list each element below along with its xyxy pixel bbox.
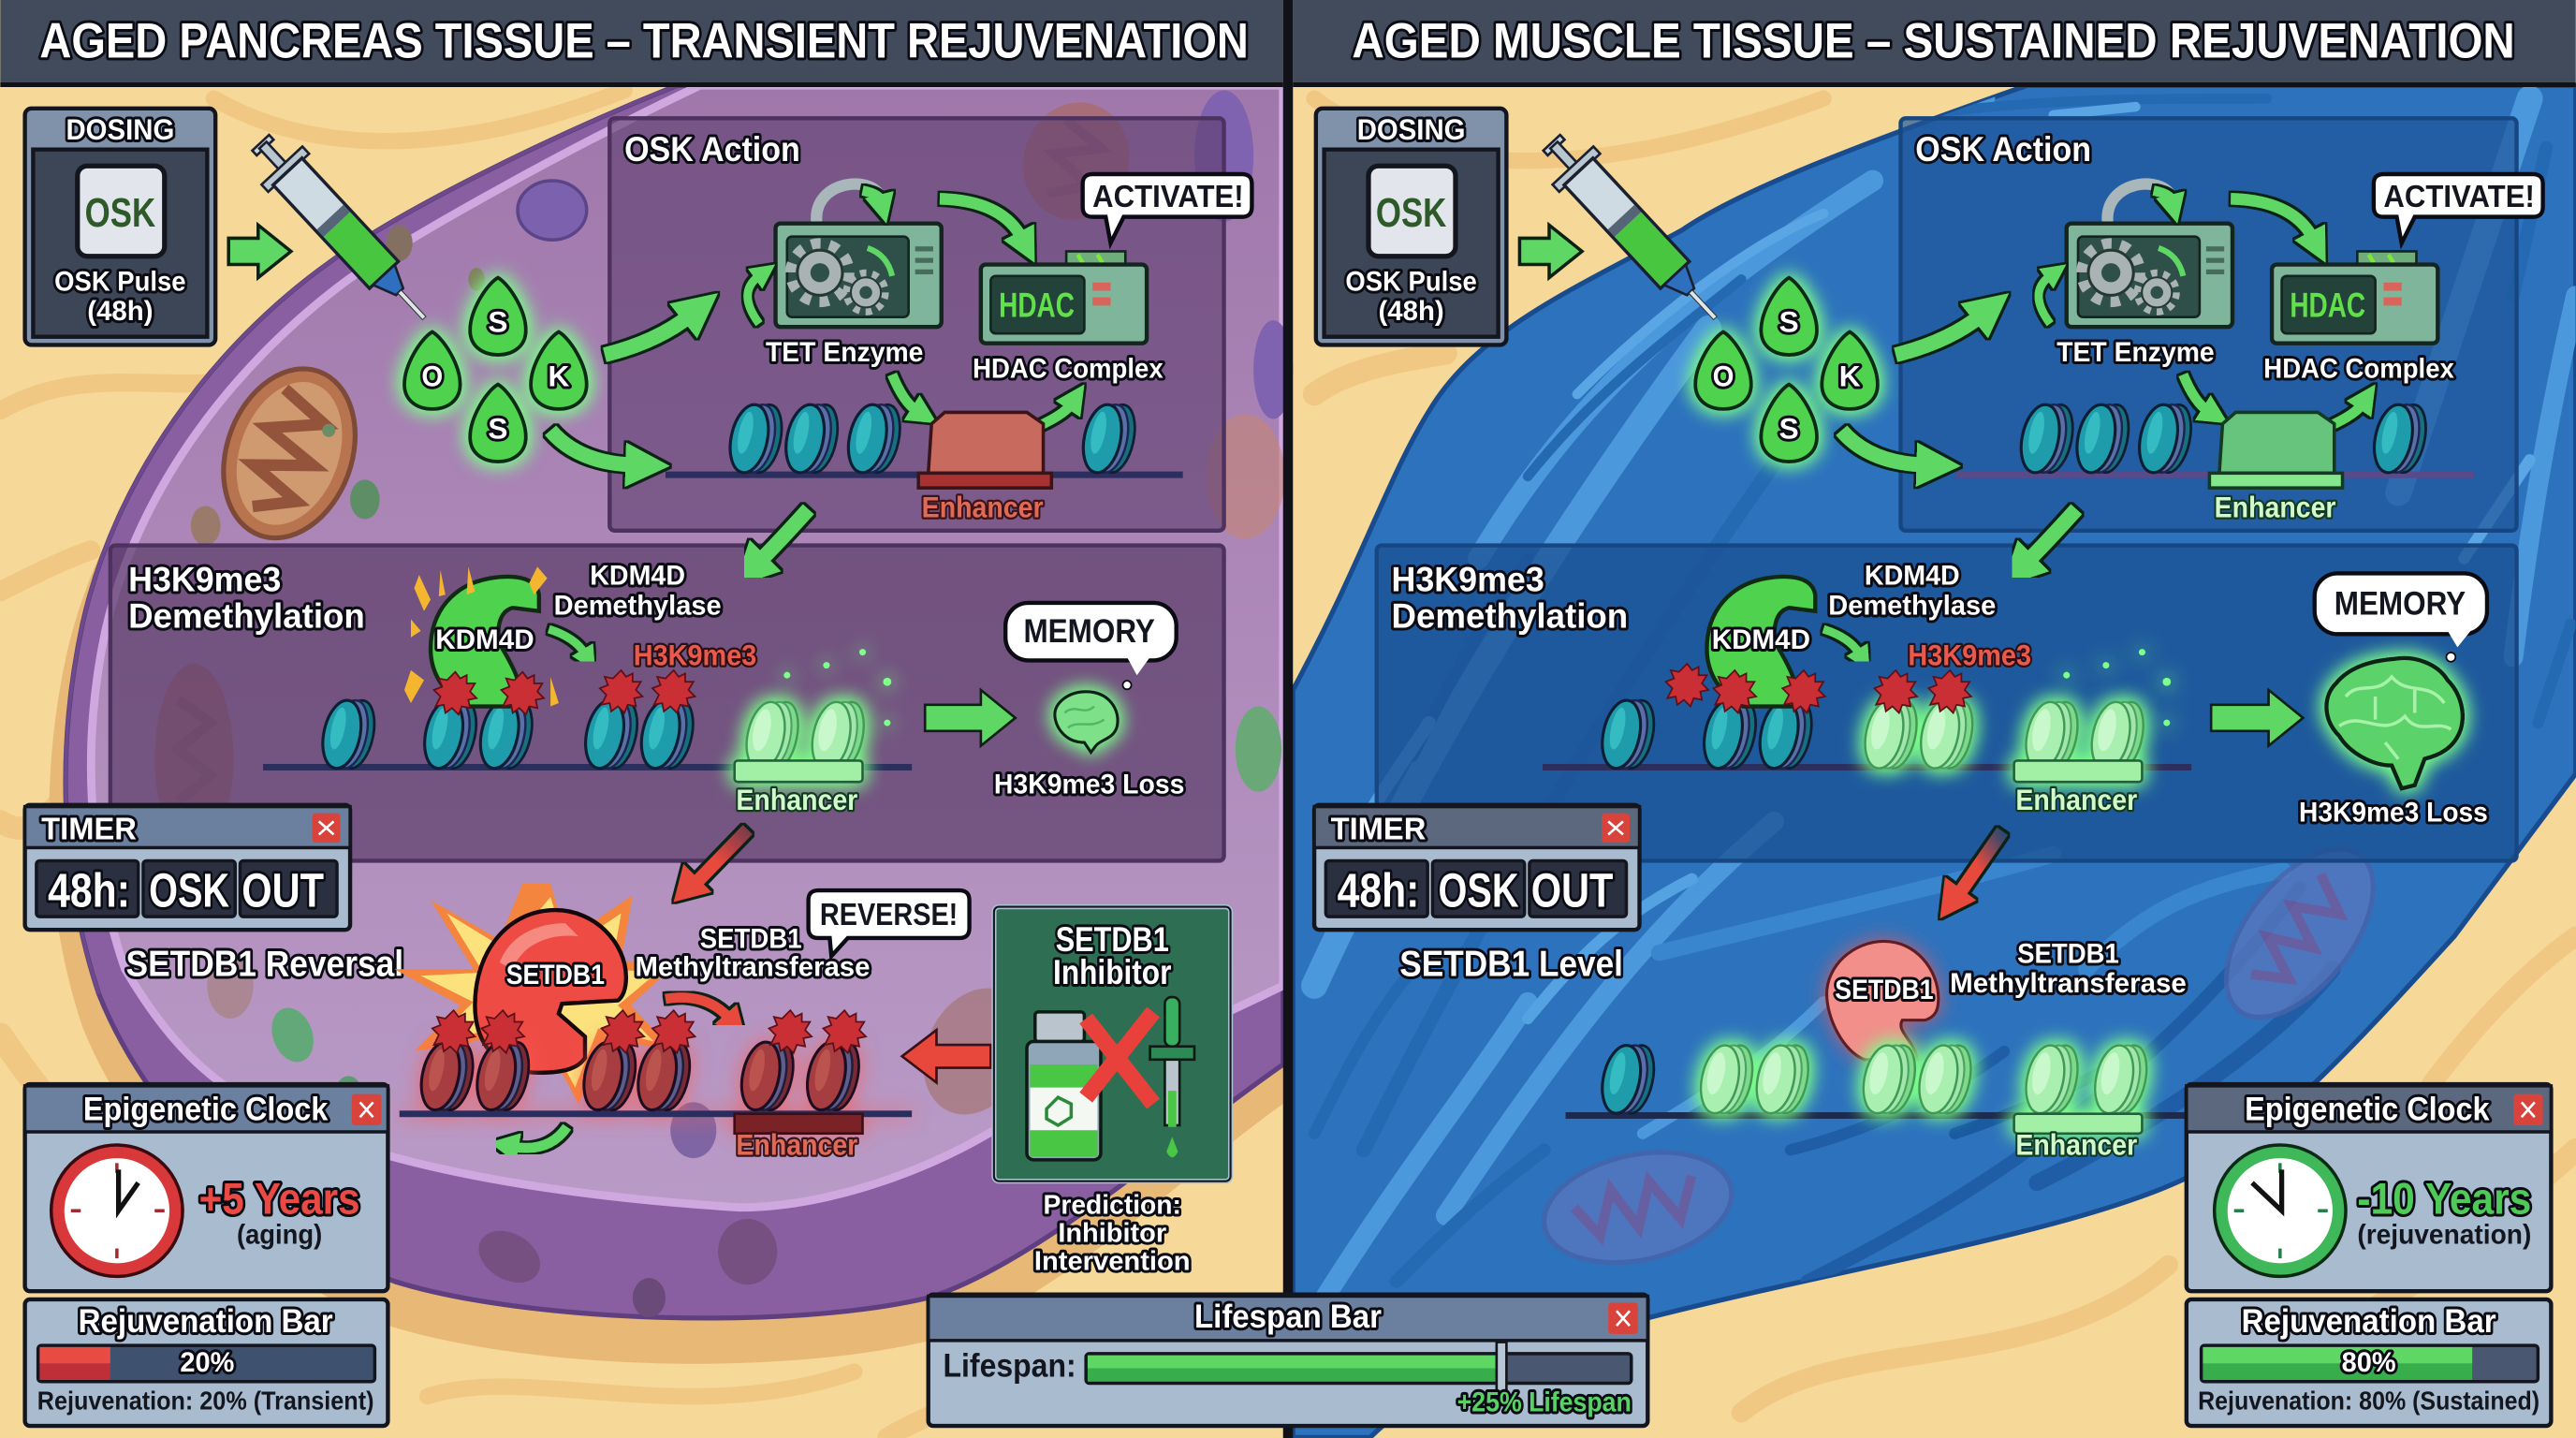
arrows: OSK to targets right xyxy=(1841,315,1981,465)
icon: bottle xyxy=(1027,1012,1101,1160)
OSK drops left: O xyxy=(421,359,443,392)
mitochondrion: muscle upper right xyxy=(2198,823,2402,1043)
HDAC machine left xyxy=(981,251,1147,344)
label: prediction: Inhibitor xyxy=(1058,1219,1166,1249)
lifespan label: Lifespan: xyxy=(944,1347,1076,1384)
label: Enhancer left: Enhancer xyxy=(922,491,1044,524)
organelle: purple vesicle xyxy=(518,181,587,240)
panel: dosing right xyxy=(1316,109,1506,345)
HDAC machine right xyxy=(2272,251,2437,344)
label: H3K9me3 Demethylation left: Demethylation xyxy=(128,596,365,635)
label: TET Enzyme left: TET Enzyme xyxy=(766,337,923,368)
icon: small brain left xyxy=(1055,692,1118,753)
clock close xyxy=(2513,1094,2543,1125)
label: H3K9me3 Loss left: H3K9me3 Loss xyxy=(994,770,1184,800)
label: H3K9me3 Loss right: H3K9me3 Loss xyxy=(2299,797,2488,828)
arrow: OSK action to demethylation right xyxy=(2027,509,2076,562)
enzyme: SETDB1 big xyxy=(475,910,626,1073)
label: KDM4D Demethylase left xyxy=(554,561,722,621)
label: H3K9me3 Demethylation right: Demethylation xyxy=(1392,596,1628,635)
panel: muscle H3K9me3 demethylation xyxy=(1377,546,2517,860)
callout: ACTIVATE right: ACTIVATE! xyxy=(2383,180,2535,214)
callout: ACTIVATE left: ACTIVATE! xyxy=(1092,180,1244,214)
timer close xyxy=(313,814,341,843)
label: TET Enzyme right: TET Enzyme xyxy=(2056,337,2215,368)
bar: 80% xyxy=(2342,1347,2396,1378)
panel: muscle OSK action xyxy=(1901,118,2517,531)
OSK drops left: S xyxy=(488,304,508,338)
timer readouts xyxy=(37,860,337,917)
label: H3K9me3 Demethylation right xyxy=(1392,561,1628,635)
label: OSK Action right: OSK Action xyxy=(1915,130,2091,169)
timer readouts: 48h: xyxy=(1338,864,1419,917)
label: SETDB1 Methyltransferase right: Methyltransferase xyxy=(1950,968,2187,999)
label: Enhancer lower right: Enhancer xyxy=(2015,1128,2137,1162)
icon: clock green xyxy=(2215,1145,2346,1276)
arrow: to memory right xyxy=(2211,690,2303,746)
label: SETDB1 Level: SETDB1 Level xyxy=(1399,944,1623,984)
panel: epigenetic clock right xyxy=(2187,1084,2551,1291)
panel: lifespan bar xyxy=(929,1295,1647,1426)
timer title: TIMER xyxy=(1331,813,1426,847)
enzyme: KDM4D left: KDM4D xyxy=(435,624,534,655)
label: SETDB1 Methyltransferase left xyxy=(635,923,870,982)
OSK vial key xyxy=(78,166,165,257)
timer title: TIMER xyxy=(41,813,137,847)
glow particles right xyxy=(2063,649,2171,726)
label: KDM4D Demethylase right xyxy=(1828,561,1996,621)
rejuvenation value: (rejuvenation) xyxy=(2357,1219,2531,1250)
chromatin left xyxy=(263,697,912,771)
histone marks left xyxy=(434,670,695,714)
label: HDAC Complex right: HDAC Complex xyxy=(2263,354,2454,385)
bar xyxy=(2202,1345,2538,1382)
header: right xyxy=(1293,0,2576,87)
arrows: TET loop and to HDAC right xyxy=(2039,191,2363,425)
bar title: Rejuvenation Bar xyxy=(2242,1303,2496,1340)
cell: pancreas xyxy=(66,85,1283,1318)
callout: ACTIVATE left xyxy=(1083,174,1251,243)
arrow: KDM4D action right xyxy=(1823,629,1860,653)
chromatin with red enhancer left xyxy=(666,401,1183,488)
dosing label: DOSING xyxy=(1357,112,1466,146)
pulse label: OSK Pulse xyxy=(1345,267,1477,298)
mitochondrion: faint in OSK panel xyxy=(1008,89,1145,233)
burst behind SETDB1 xyxy=(394,884,677,1104)
label: KDM4D Demethylase left: KDM4D xyxy=(590,561,685,592)
OSK vial key xyxy=(1368,166,1456,257)
rejuvenation value xyxy=(2357,1175,2531,1250)
label: H3K9me3 Demethylation left: H3K9me3 xyxy=(128,561,281,599)
histone marks red xyxy=(432,1010,866,1053)
TET enzyme machine left xyxy=(776,184,942,327)
timer readouts: 48h: xyxy=(48,864,130,917)
OSK action contents right xyxy=(1841,130,2543,524)
panel: epigenetic clock left xyxy=(25,1084,388,1291)
label: OSK Action left: OSK Action xyxy=(624,130,800,169)
icon: clock red xyxy=(51,1145,183,1276)
pulse label xyxy=(1345,267,1477,327)
label: SETDB1 Reversal: SETDB1 Reversal xyxy=(126,944,403,984)
arrows: OSK to targets left xyxy=(550,315,690,465)
panel: pancreas H3K9me3 demethylation xyxy=(110,546,1224,860)
mitochondrion: muscle lower xyxy=(1534,1137,1742,1279)
arrow: enhancer to SETDB1 right xyxy=(1940,831,2002,918)
timer readouts: OSK xyxy=(149,864,229,917)
icon: syringe right xyxy=(1531,124,1735,337)
lifespan title: Lifespan Bar xyxy=(1194,1299,1382,1335)
arrow: KDM4D action left xyxy=(549,629,585,653)
HDAC machine left: HDAC xyxy=(999,286,1075,325)
label: SETDB1 on small enzyme: SETDB1 xyxy=(1835,975,1934,1005)
arrow: green return xyxy=(513,1127,567,1148)
histone marks right xyxy=(1666,664,1971,713)
OSK drops right xyxy=(1695,278,1878,462)
bar title: Rejuvenation Bar xyxy=(79,1303,333,1340)
callout: REVERSE: REVERSE! xyxy=(820,898,958,932)
chromatin with green enhancer right xyxy=(1956,401,2474,488)
enzyme: KDM4D right xyxy=(1706,577,1815,707)
OSK drops right: S xyxy=(1779,412,1799,446)
OSK vial key: OSK xyxy=(85,190,155,236)
clock close xyxy=(352,1094,381,1125)
sparks left xyxy=(404,566,559,707)
glowing nucleosomes lower right xyxy=(1695,1042,2152,1134)
timer readouts: OUT xyxy=(1531,864,1613,917)
label: SETDB1 Methyltransferase left: SETDB1 xyxy=(700,923,802,954)
mitochondrion: left large xyxy=(201,350,378,557)
mitochondrion: faint in demethylation panel xyxy=(154,664,233,854)
label: Enhancer red lower: Enhancer xyxy=(736,1128,857,1162)
enzyme: KDM4D left xyxy=(431,577,539,707)
icon: large brain right xyxy=(2326,658,2463,788)
lifespan gauge xyxy=(1086,1343,1632,1393)
TET enzyme machine right xyxy=(2067,184,2232,327)
OSK drops right: K xyxy=(1839,359,1861,392)
chromatin lower right xyxy=(1566,1042,2191,1117)
HDAC machine right: HDAC xyxy=(2290,286,2365,325)
callout: MEMORY right: MEMORY xyxy=(2334,585,2466,622)
enhancer glowing right xyxy=(2014,698,2149,782)
lifespan close xyxy=(1608,1302,1638,1334)
pulse label: (48h) xyxy=(87,296,153,327)
timer readouts xyxy=(1325,860,1626,917)
pulse label xyxy=(54,267,186,327)
clock title: Epigenetic Clock xyxy=(2245,1092,2490,1128)
OSK drops right: O xyxy=(1713,359,1734,392)
panel: timer right xyxy=(1314,805,1640,930)
bar xyxy=(38,1345,374,1382)
inhibitor title: SETDB1 xyxy=(1056,920,1169,959)
callout: MEMORY left: MEMORY xyxy=(1023,613,1155,650)
arrow: enhancer to SETDB1 left xyxy=(674,829,748,902)
label: prediction: Intervention xyxy=(1034,1246,1191,1276)
label: KDM4D Demethylase left: Demethylase xyxy=(554,590,722,621)
label: HDAC Complex left: HDAC Complex xyxy=(973,354,1164,385)
cell: muscle xyxy=(1293,85,2576,1437)
arrow: dosing to syringe left xyxy=(228,225,291,278)
label: KDM4D Demethylase right: KDM4D xyxy=(1865,561,1960,592)
bar caption: Rejuvenation: 20% (Transient) xyxy=(37,1387,373,1416)
glowing nucleosomes right xyxy=(1859,697,1978,771)
enzyme: SETDB1 small xyxy=(1827,941,1939,1060)
arrow: SETDB1 spread xyxy=(666,997,729,1019)
timer readouts: OUT xyxy=(242,864,324,917)
enzyme: SETDB1 big: SETDB1 xyxy=(506,960,605,990)
label: Enhancer glowing right: Enhancer xyxy=(2015,783,2137,816)
bar caption: Rejuvenation: 80% (Sustained) xyxy=(2198,1387,2539,1416)
aging value xyxy=(199,1175,360,1250)
timer readouts: OSK xyxy=(1439,864,1519,917)
panel: pancreas OSK action xyxy=(609,118,1224,531)
rejuvenation value: -10 Years xyxy=(2357,1175,2531,1225)
label: prediction xyxy=(1034,1191,1191,1276)
glow particles left xyxy=(783,649,891,726)
panel: SETDB1 inhibitor xyxy=(994,907,1231,1181)
OSK drops left xyxy=(404,278,587,462)
label: SETDB1 Methyltransferase right: SETDB1 xyxy=(2017,938,2119,969)
label: H3K9me3 red right: H3K9me3 xyxy=(1908,638,2031,672)
pulse label: OSK Pulse xyxy=(54,267,186,298)
enzyme: KDM4D right: KDM4D xyxy=(1712,624,1810,655)
callout: MEMORY right xyxy=(2315,573,2487,662)
arrow: inhibitor to enhancer xyxy=(902,1030,990,1082)
pulse label: (48h) xyxy=(1379,296,1444,327)
label: H3K9me3 red left: H3K9me3 xyxy=(634,638,756,672)
OSK vial key: OSK xyxy=(1376,190,1447,236)
lifespan gain: +25% Lifespan xyxy=(1457,1387,1632,1417)
label: KDM4D Demethylase right: Demethylase xyxy=(1828,590,1996,621)
label: H3K9me3 Demethylation right: H3K9me3 xyxy=(1392,561,1544,599)
panel: rejuvenation bar right xyxy=(2187,1299,2551,1426)
dosing label: DOSING xyxy=(66,112,174,146)
callout: ACTIVATE right xyxy=(2374,174,2543,243)
muscle fibres xyxy=(1314,98,2576,1314)
arrows: TET loop and to HDAC left xyxy=(748,191,1071,425)
enhancer glowing left xyxy=(735,698,870,782)
label: Enhancer glowing left: Enhancer xyxy=(736,783,857,816)
title: pancreas: AGED PANCREAS TISSUE – TRANSIENT REJUVENATION xyxy=(39,13,1249,68)
inhibitor title: Inhibitor xyxy=(1053,953,1171,991)
icon: syringe left xyxy=(241,124,445,337)
label: SETDB1 Methyltransferase left: Methyltransferase xyxy=(635,951,870,982)
chromatin right xyxy=(1543,697,2191,771)
icon: dropper xyxy=(1150,997,1194,1157)
OSK drops right: S xyxy=(1779,304,1799,338)
central divider xyxy=(1283,0,1293,1438)
label: Enhancer right: Enhancer xyxy=(2215,491,2336,524)
cell shadow: pancreas xyxy=(50,131,1283,1364)
inhibitor title xyxy=(1053,920,1171,991)
OSK drops left: S xyxy=(488,412,508,446)
arrow: OSK action to demethylation left xyxy=(759,509,809,562)
label: H3K9me3 Demethylation left xyxy=(128,561,365,635)
aging value: +5 Years xyxy=(199,1175,360,1225)
clock title: Epigenetic Clock xyxy=(83,1092,329,1128)
callout: REVERSE xyxy=(809,890,970,956)
panel: timer left xyxy=(25,805,350,930)
arrow: dosing to syringe right xyxy=(1519,225,1582,278)
bar: 20% xyxy=(180,1347,234,1378)
label: SETDB1 Methyltransferase right xyxy=(1950,938,2187,999)
label: prediction: Prediction: xyxy=(1044,1191,1181,1221)
callout: MEMORY left xyxy=(1005,603,1177,689)
panel: dosing left xyxy=(25,109,215,345)
icon: red cross xyxy=(1086,1012,1153,1104)
header: left xyxy=(0,0,1283,87)
OSK drops left: K xyxy=(548,359,569,392)
panel: rejuvenation bar left xyxy=(25,1299,388,1426)
arrow: to memory left xyxy=(925,690,1016,746)
timer close xyxy=(1602,814,1630,843)
organelles: pancreas small xyxy=(191,91,1293,1317)
chromatin red xyxy=(400,1038,912,1134)
aging value: (aging) xyxy=(237,1219,322,1250)
